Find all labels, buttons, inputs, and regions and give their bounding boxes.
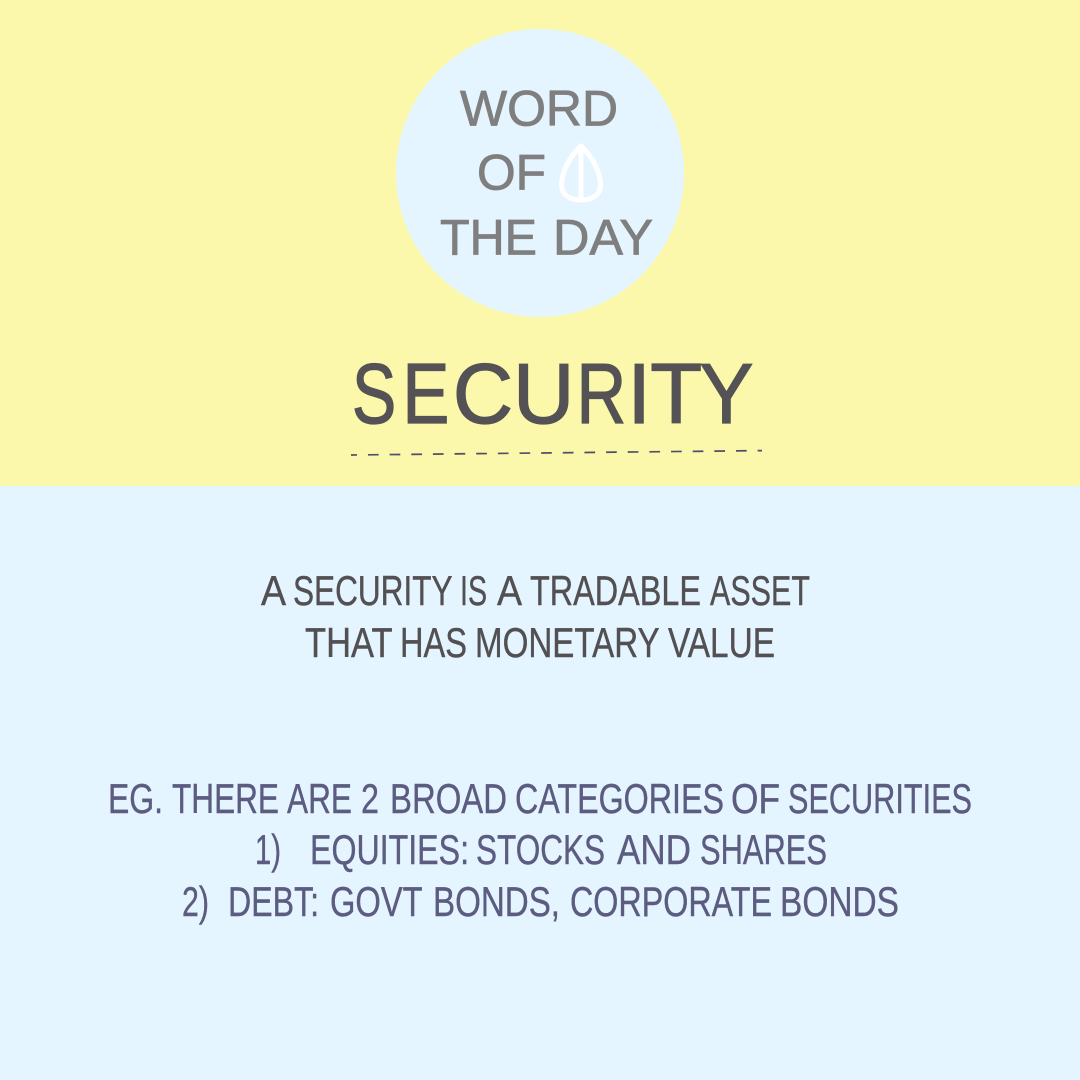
definition text: A bbox=[497, 567, 522, 614]
icon: white seed bbox=[562, 146, 600, 200]
example text: OF bbox=[731, 775, 780, 822]
title: E bbox=[402, 347, 449, 442]
list item 2: GOVT bbox=[330, 878, 422, 925]
definition text: A bbox=[261, 567, 286, 614]
list item 1: STOCKS bbox=[476, 826, 605, 873]
example text: SECURITIES bbox=[788, 775, 972, 822]
title: R bbox=[576, 347, 626, 442]
title: T bbox=[650, 347, 702, 442]
badge text: of: OF bbox=[477, 144, 546, 200]
list item 2: BONDS, bbox=[433, 878, 560, 925]
list item 2: BONDS bbox=[780, 878, 899, 925]
list item 1: AND bbox=[617, 826, 691, 873]
title: I bbox=[627, 347, 651, 442]
definition text: SECURITY bbox=[293, 567, 453, 614]
example text: EG. bbox=[108, 775, 163, 822]
definition text: IS bbox=[460, 567, 487, 614]
list item 1: EQUITIES: bbox=[310, 826, 469, 873]
list item 1: 1) bbox=[255, 826, 281, 873]
definition text: THAT bbox=[305, 619, 392, 666]
definition text: TRADABLE bbox=[530, 567, 701, 614]
definition text: ASSET bbox=[710, 567, 810, 614]
badge text: the day: DAY bbox=[553, 210, 653, 266]
badge text: the day: THE bbox=[440, 210, 537, 266]
title: S bbox=[352, 347, 396, 442]
panel: blue body bbox=[0, 486, 1080, 1080]
definition text: HAS bbox=[400, 619, 467, 666]
title: C bbox=[453, 347, 513, 442]
example text: BROAD bbox=[390, 775, 507, 822]
title: Y bbox=[700, 347, 753, 442]
list item 2: 2) bbox=[182, 878, 209, 925]
panel: yellow header bbox=[0, 0, 1080, 486]
example text: THERE bbox=[172, 775, 279, 822]
badge: word of the day bbox=[396, 29, 684, 317]
title: U bbox=[513, 347, 574, 442]
list item 2: CORPORATE bbox=[570, 878, 772, 925]
list item 1: SHARES bbox=[700, 826, 827, 873]
definition text: VALUE bbox=[668, 619, 775, 666]
example text bbox=[108, 775, 972, 925]
dashed underline bbox=[351, 451, 762, 455]
example text: 2 bbox=[361, 775, 379, 822]
definition text bbox=[261, 567, 810, 666]
example text: ARE bbox=[287, 775, 352, 822]
example text: CATEGORIES bbox=[515, 775, 724, 822]
definition text: MONETARY bbox=[475, 619, 660, 666]
list item 2: DEBT: bbox=[228, 878, 319, 925]
badge text: word: WORD bbox=[460, 80, 618, 136]
